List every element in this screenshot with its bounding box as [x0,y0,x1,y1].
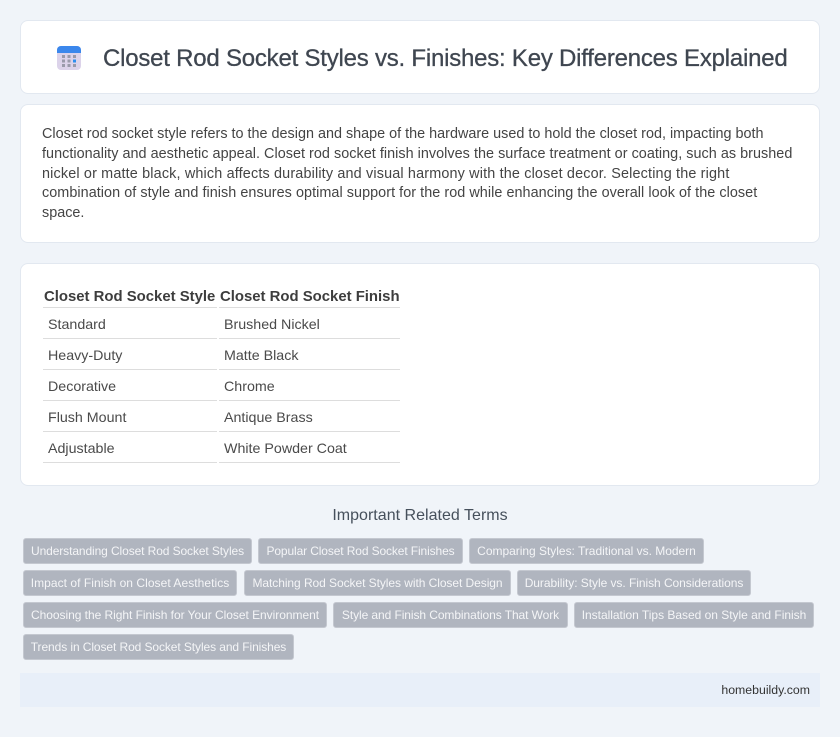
table: styles vs finishes: Brushed Nickel [224,317,320,333]
table: styles vs finishes: Decorative [48,379,116,395]
table: styles vs finishes [43,289,400,463]
table: styles vs finishes: Heavy-Duty [48,348,122,364]
panel: comparison table [20,263,820,486]
tag: Installation Tips Based on Style and Finish [582,608,806,622]
tag: Popular Closet Rod Socket Finishes [266,544,454,558]
tag: Durability: Style vs. Finish Considerations [525,576,743,590]
text block: intro paragraph: functionality and aesthetic appeal. Closet rod socket finish involves the surface treatment or coating, such as brushed [42,146,792,162]
text block: intro paragraph: nickel or matte black, which affects durability and visual harmony with the closet decor. Selecting the right [42,166,729,182]
tag: Matching Rod Socket Styles with Closet Design [252,576,503,590]
text block: intro paragraph: combination of style and finish ensures optimal support for the rod while enhancing the overall look of the closet [42,185,757,201]
tag [23,570,237,596]
tag: Understanding Closet Rod Socket Styles [31,544,244,558]
tag [517,570,751,596]
tag: Choosing the Right Finish for Your Closet Environment [31,608,319,622]
table: styles vs finishes: Closet Rod Socket Finish [220,289,400,305]
tag [333,602,568,628]
tag [258,538,463,564]
table: styles vs finishes: Matte Black [224,348,298,364]
table: styles vs finishes: Chrome [224,379,275,395]
footer text: source: homebuildy.com [721,683,810,697]
tag: Impact of Finish on Closet Aesthetics [31,576,229,590]
tag [469,538,704,564]
tag: Style and Finish Combinations That Work [342,608,559,622]
tag: Trends in Closet Rod Socket Styles and Finishes [31,640,286,654]
table: styles vs finishes: Adjustable [48,441,115,457]
tag [23,538,252,564]
table: styles vs finishes: Antique Brass [224,410,313,426]
table: styles vs finishes: Standard [48,317,106,333]
footer bar [20,673,820,707]
panel: title header [20,20,820,94]
table: styles vs finishes: Closet Rod Socket Style [44,289,215,305]
icon: calendar [57,46,81,70]
tag list: related terms [23,538,814,660]
title: Closet Rod Socket Styles vs. Finishes: Key Differences Explained [103,45,787,72]
table: styles vs finishes: White Powder Coat [224,441,347,457]
heading: related terms: Important Related Terms [332,507,508,524]
panel: intro text [20,104,820,243]
text block: intro paragraph [42,126,792,221]
tag: Comparing Styles: Traditional vs. Modern [477,544,696,558]
tag [23,602,327,628]
tag [574,602,814,628]
text block: intro paragraph: Closet rod socket style refers to the design and shape of the hardware used to hold the closet rod, impacting both [42,126,764,142]
text block: intro paragraph: space. [42,205,84,221]
tag [23,634,294,660]
tag [244,570,511,596]
table: styles vs finishes: Flush Mount [48,410,126,426]
